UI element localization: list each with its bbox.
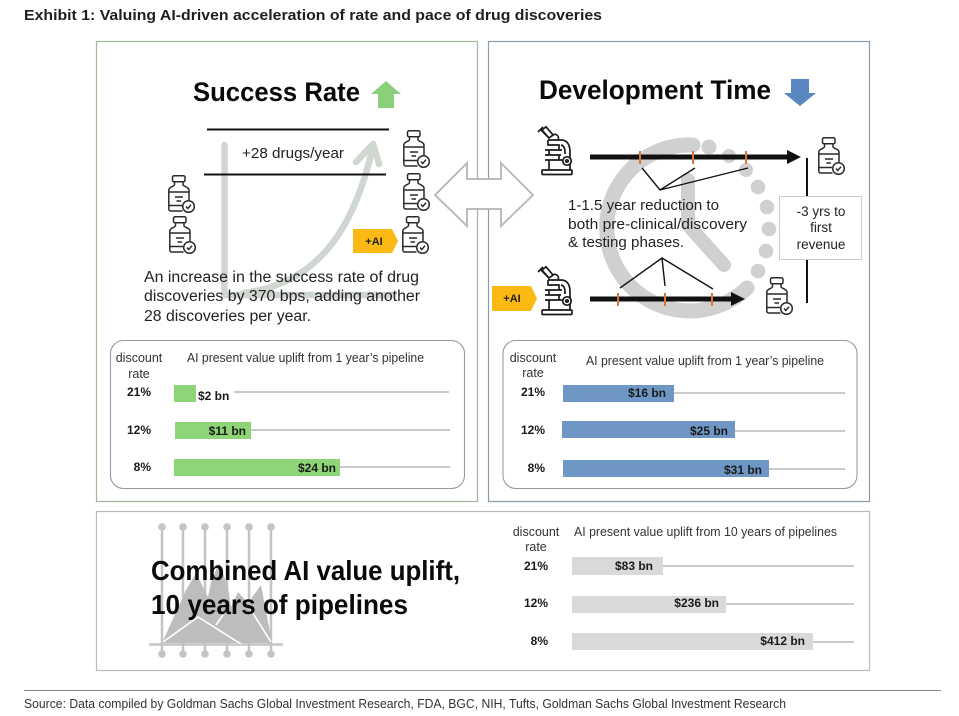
icon: bottle top [819,138,844,174]
chart: development time 1-year uplift: $31 bn [724,463,762,477]
icon: growth chart arrow [224,144,392,295]
tag: plus AI [353,229,398,253]
panel: success rate [96,42,478,502]
heading: success rate: Success Rate [193,77,360,107]
chart: 10-year uplift: $83 bn [615,559,653,573]
icon: microscope bottom [538,267,572,314]
bracket line [806,158,808,303]
text: success rate description: discoveries by 370 bps, adding another [144,288,420,305]
chart: 10-year uplift: 21% [524,559,548,573]
text: success rate description: 28 discoveries per year. [144,308,311,325]
text: reduction description: 1-1.5 year reduction to [568,197,719,214]
chart: 10-year uplift: 12% [524,596,548,610]
icon: microscope top [538,127,572,174]
chart: 10-year uplift: AI present value uplift from 10 years of pipelines [574,525,837,539]
icons: baseline drug bottles [169,176,195,253]
icons: AI drug bottles [403,131,429,253]
chart: success rate 1-year uplift: rate [128,367,150,381]
panel: combined uplift [96,512,870,670]
timeline: with AI [590,258,745,306]
chart: 10-year uplift: discount [513,525,560,539]
tag: plus AI [492,286,537,311]
chart: success rate 1-year uplift: 21% [127,385,151,399]
chart: development time 1-year uplift: $25 bn [690,424,728,438]
icon: clock watermark [607,140,776,311]
text: success rate description: An increase in the success rate of drug [144,269,419,286]
source note: Source: Data compiled by Goldman Sachs Global Investment Research, FDA, BGC, NIH, Tufts, Goldman Sachs Global Investment Research [24,697,786,711]
chart: development time 1-year uplift: 8% [528,461,545,475]
chart: 10-year uplift [513,525,854,650]
chart: development time 1-year uplift: AI present value uplift from 1 year’s pipeline [586,354,824,368]
chart: success rate 1-year uplift [110,340,464,488]
icon: blue down arrow [784,79,816,106]
tag: plus AI: +AI [365,236,383,248]
callout: time to first revenue: -3 yrs to [797,204,845,219]
icon: bottle bottom [767,278,792,314]
chart: success rate 1-year uplift: AI present value uplift from 1 year’s pipeline [187,351,424,365]
bottom rule [204,174,386,176]
heading: development time: Development Time [539,75,771,105]
tag: plus AI: +AI [503,293,521,305]
icon: green up arrow [371,81,401,108]
text: reduction description: both pre-clinical/discovery [568,216,748,233]
chart: 10-year uplift: 8% [531,634,548,648]
chart: 10-year uplift: $236 bn [674,596,719,610]
title: Exhibit 1: Valuing AI-driven acceleration of rate and pace of drug discoveries [24,7,602,24]
chart: success rate 1-year uplift: $24 bn [298,461,336,475]
chart: success rate 1-year uplift: discount [116,351,163,365]
callout: time to first revenue: first [810,220,832,235]
timeline: current [590,150,801,190]
chart: development time 1-year uplift: rate [522,366,544,380]
chart: development time 1-year uplift: $16 bn [628,386,666,400]
heading: combined uplift: Combined AI value uplift, [151,555,460,586]
chart: development time 1-year uplift [503,340,857,488]
panel: development time [488,42,870,502]
callout: time to first revenue [780,196,862,260]
double arrow between panels [435,163,533,226]
heading: combined uplift [151,555,460,620]
chart: development time 1-year uplift: discount [510,351,557,365]
chart: success rate 1-year uplift: $11 bn [209,424,246,438]
chart: 10-year uplift: $412 bn [760,634,805,648]
icon: pipeline mountains watermark [149,523,283,658]
chart: success rate 1-year uplift: 8% [134,460,151,474]
label: drugs per year: +28 drugs/year [242,145,344,162]
top rule [207,128,389,130]
callout: time to first revenue: revenue [797,237,845,252]
chart: 10-year uplift: rate [525,540,547,554]
chart: development time 1-year uplift: 21% [521,385,545,399]
text: reduction description: & testing phases. [568,234,684,251]
chart: development time 1-year uplift: 12% [521,423,545,437]
chart: success rate 1-year uplift: 12% [127,423,151,437]
chart: success rate 1-year uplift: $2 bn [198,389,229,403]
heading: combined uplift: 10 years of pipelines [151,589,408,620]
